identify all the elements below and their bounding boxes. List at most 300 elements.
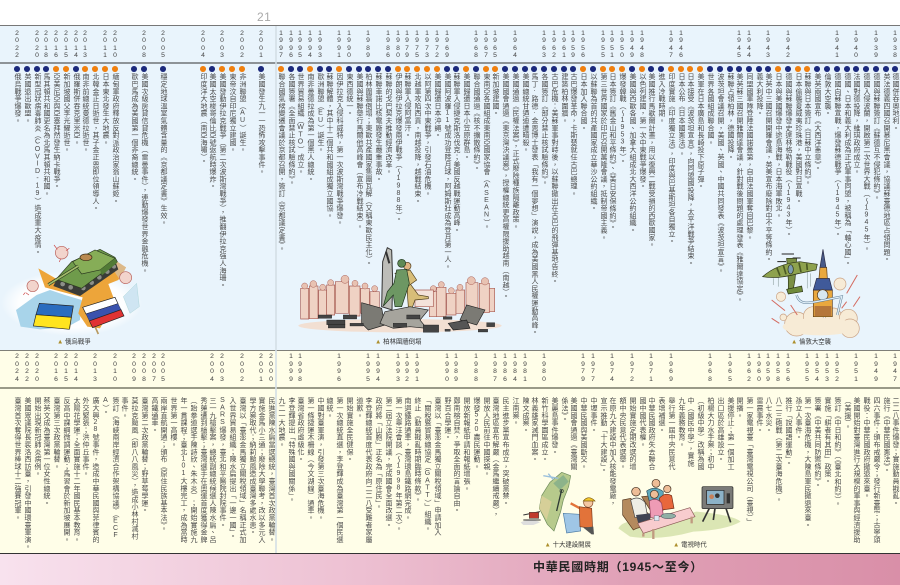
world timeline events: 倫敦大空襲。 [824, 72, 831, 116]
world timeline events: 世界各國組成聯合國。 [707, 72, 714, 146]
Taiwan timeline years: 1 [454, 353, 458, 360]
world timeline years: 0 [259, 37, 263, 44]
Taiwan timeline events: 四六事件；頒布戒嚴令；發行新臺幣；古寧頭 [873, 396, 880, 542]
world timeline years: 2 [435, 52, 439, 59]
world timeline years: 1 [669, 30, 673, 36]
world timeline years: 1 [854, 30, 858, 36]
Taiwan timeline years: 9 [454, 376, 458, 383]
world timeline years: 9 [396, 37, 400, 44]
world timeline years: 2 [74, 30, 78, 36]
Taiwan timeline events: 民進黨陳水扁當選總統，臺灣首次政黨輪替。 [268, 396, 275, 542]
world timeline events: 美國歸還日本沖繩。 [434, 72, 441, 138]
world timeline events: 緬甸軍政府釋放反對派政治家翁山蘇姬。 [112, 72, 119, 204]
Taiwan timeline years: 3 [93, 376, 97, 383]
Taiwan timeline events: 江南案。 [512, 396, 519, 426]
world timeline years: 1 [552, 30, 556, 36]
world timeline years: 1 [581, 30, 585, 36]
Taiwan timeline years: 1 [93, 368, 97, 375]
Taiwan timeline years: 7 [630, 368, 634, 375]
world timeline years: 1 [337, 30, 341, 36]
Taiwan timeline years: 1 [766, 353, 770, 360]
Taiwan timeline years: 4 [513, 376, 517, 383]
Taiwan timeline years: 5 [366, 376, 370, 383]
Taiwan timeline years: 1 [581, 353, 585, 360]
Taiwan timeline events: 開始出現新冠肺炎病例。 [34, 396, 41, 477]
Taiwan timeline years: 6 [503, 376, 507, 383]
world timeline years: 6 [493, 45, 497, 52]
world timeline events: 伊朗與伊拉克爆發兩伊戰爭（～ 1988 年）。 [395, 72, 402, 222]
world timeline events: 美國推行馬歇爾計畫，用以復興二戰受損的西歐國家。 [648, 72, 655, 248]
world timeline years: 6 [474, 45, 478, 52]
world timeline years: 2 [786, 52, 790, 59]
world timeline years: 0 [161, 37, 165, 44]
world timeline years: 0 [54, 37, 58, 44]
world timeline years: 4 [630, 45, 634, 52]
Taiwan timeline years: 2 [113, 353, 117, 360]
world timeline years: 5 [581, 45, 585, 52]
world timeline events: 爆發韓戰（～ 1953 年）。 [619, 72, 626, 164]
world timeline years: 2 [552, 52, 556, 59]
Taiwan timeline years: 7 [591, 376, 595, 383]
Taiwan timeline years: 0 [25, 361, 29, 368]
Taiwan timeline years: 2 [142, 353, 146, 360]
world timeline years: 9 [484, 37, 488, 44]
Taiwan timeline years: 6 [786, 376, 790, 383]
world timeline years: 6 [484, 45, 488, 52]
world timeline events: 印度洋大地震（南亞海嘯）。 [200, 72, 207, 164]
world timeline years: 2 [220, 30, 224, 36]
Taiwan timeline events: 表增補選。 [658, 396, 665, 433]
Taiwan timeline years: 5 [728, 376, 732, 383]
world timeline years: 6 [581, 52, 585, 59]
world timeline events: 美國通過《民權法案》，正式廢除種族隔離政策。 [512, 72, 519, 230]
world timeline events: 穩定地球溫室氣體含量的《京都議定書》生效。 [160, 72, 167, 226]
Taiwan timeline years: 8 [708, 376, 712, 383]
world timeline years: 0 [854, 52, 858, 59]
world timeline years: 9 [279, 37, 283, 44]
Taiwan timeline events: 宣示推動「十大建設」。 [600, 396, 607, 473]
world timeline years: 8 [474, 52, 478, 59]
Taiwan timeline events: 民主進步黨宣布成立，突破黨禁。 [502, 396, 509, 506]
world timeline years: 1 [766, 30, 770, 36]
world timeline years [15, 30, 897, 59]
Taiwan timeline events: 三一九槍擊案，總統副總統候選人陳水扁、呂 [209, 396, 216, 542]
Taiwan timeline years: 1 [405, 353, 409, 360]
world timeline years: 3 [874, 45, 878, 52]
Taiwan timeline years: 1 [649, 353, 653, 360]
title bar [0, 553, 900, 585]
Taiwan timeline events: 政府將「山胞」正名為「原住民」。 [375, 396, 382, 510]
Taiwan timeline years: 2 [240, 376, 244, 383]
Taiwan timeline years: 9 [376, 361, 380, 368]
Taiwan timeline events: 第一次臺海危機，大陳島軍民撤退來臺。 [804, 396, 811, 528]
Taiwan timeline events: （跆拳道選手陳詩欣、朱木炎）；開始實施九 [190, 396, 197, 542]
world timeline years: 5 [601, 45, 605, 52]
world timeline years: 9 [562, 37, 566, 44]
Taiwan timeline years: 2 [15, 353, 19, 360]
world timeline events: 義大利投降。 [756, 72, 763, 116]
world timeline years: 1 [630, 30, 634, 36]
Taiwan timeline years: 5 [786, 368, 790, 375]
world timeline years: 4 [737, 45, 741, 52]
Taiwan timeline events: 開始實施全民健保。 [346, 396, 353, 462]
world timeline years: 4 [747, 45, 751, 52]
page fold [275, 26, 277, 553]
world timeline years: 0 [201, 45, 205, 52]
world timeline events: 日本加入聯合國。 [580, 72, 587, 131]
Taiwan timeline years: 8 [542, 368, 546, 375]
world timeline years: 8 [366, 45, 370, 52]
world timeline events: 南非曼德拉成為第一個黑人總統。 [307, 72, 314, 182]
Taiwan timeline years: 0 [210, 361, 214, 368]
Taiwan timeline events: 李登輝總統首度代表政府向二二八受難者家屬 [365, 396, 372, 542]
Taiwan timeline years: 1 [728, 353, 732, 360]
world timeline years: 2 [15, 30, 19, 36]
Taiwan timeline years: 9 [396, 361, 400, 368]
Taiwan timeline years: 9 [815, 361, 819, 368]
Taiwan timeline events: 臺灣以「臺澎金馬獨立關稅領域」名稱正式加 [239, 396, 246, 542]
world timeline events: 英國退出歐盟。 [24, 72, 31, 124]
world timeline years: 1 [835, 52, 839, 59]
Taiwan timeline years: 0 [74, 361, 78, 368]
Taiwan timeline events: 李登輝提出「特殊國與國關係」。 [288, 396, 295, 502]
Taiwan timeline years: 0 [269, 361, 273, 368]
Taiwan timeline years: 9 [415, 368, 419, 375]
world timeline years: 9 [474, 37, 478, 44]
world timeline years: 3 [83, 52, 87, 59]
Taiwan timeline years: 2 [54, 353, 58, 360]
world timeline years: 1 [308, 30, 312, 36]
Taiwan timeline years: 1 [854, 353, 858, 360]
Taiwan timeline years: 1 [289, 353, 293, 360]
world timeline years: 1 [74, 45, 78, 52]
illustration: Russia-Ukraine war tank and flags [1, 245, 142, 336]
Taiwan timeline years: 2 [240, 353, 244, 360]
Taiwan timeline years: 6 [708, 368, 712, 375]
Taiwan timeline years: 9 [835, 361, 839, 368]
world timeline events: 印度實施《印度獨立法》，印度與巴基斯坦各自獨立。 [668, 72, 675, 244]
Taiwan timeline years: 8 [503, 368, 507, 375]
Taiwan timeline years: 9 [854, 361, 858, 368]
world timeline years: 0 [620, 52, 624, 59]
world timeline events: 新加坡建國。 [492, 72, 499, 116]
world timeline years: 1 [279, 30, 283, 36]
Taiwan timeline years: 9 [454, 361, 458, 368]
world timeline years: 9 [493, 37, 497, 44]
world timeline years: 9 [415, 37, 419, 44]
world timeline events: 英法德義四國召開慕尼黑會議，協議蘇臺德地區占領問題。 [883, 72, 890, 262]
Taiwan timeline years: 9 [503, 361, 507, 368]
Taiwan timeline years: 2 [161, 353, 165, 360]
world timeline years: 9 [347, 37, 351, 44]
Taiwan timeline events: 開放新報紙申請和報紙增張。 [463, 396, 470, 491]
Taiwan timeline years: 9 [337, 361, 341, 368]
Taiwan timeline events: 臺灣第二次政黨輪替；野草莓學運。 [141, 396, 148, 513]
world timeline years: 4 [786, 45, 790, 52]
Taiwan timeline years: 5 [835, 368, 839, 375]
world timeline years: 9 [308, 45, 312, 52]
Taiwan timeline years: 7 [610, 368, 614, 375]
Taiwan timeline years: 0 [142, 361, 146, 368]
Taiwan timeline years: 9 [396, 368, 400, 375]
Taiwan timeline years: 1 [74, 368, 78, 375]
Taiwan timeline years: 0 [113, 361, 117, 368]
Taiwan timeline years: 9 [542, 361, 546, 368]
world timeline years: 1 [103, 52, 107, 59]
Taiwan timeline years: 1 [513, 353, 517, 360]
world timeline events: 馬其頓共和國更名為北馬其頓共和國。 [43, 72, 50, 197]
world timeline years: 9 [366, 37, 370, 44]
world timeline years: 5 [161, 52, 165, 59]
world timeline events: 歐洲聯盟（ EU ）誕生。 [317, 72, 324, 153]
world timeline events: 各國簽訂《部分禁止核試驗條約》。 [541, 72, 548, 186]
world timeline years: 2 [15, 52, 19, 59]
Taiwan timeline years: 1 [445, 353, 449, 360]
world timeline years: 1 [493, 30, 497, 36]
world timeline years: 2 [259, 30, 263, 36]
world timeline years: 9 [669, 37, 673, 44]
world timeline events: 聯合國通過《核不擴散條約》。 [473, 72, 480, 171]
Taiwan timeline years: 1 [259, 376, 263, 383]
world timeline events: 新加坡國父李光耀逝世。 [63, 72, 70, 153]
world timeline years: 0 [64, 37, 68, 44]
Taiwan timeline years: 9 [786, 361, 790, 368]
world timeline events: 美軍在日本廣島和長崎投下原子彈。 [697, 72, 704, 189]
world timeline years: 5 [493, 52, 497, 59]
world timeline years: 9 [386, 37, 390, 44]
Taiwan timeline years: 2 [835, 376, 839, 383]
Taiwan timeline years: 5 [161, 376, 165, 383]
world timeline years: 7 [669, 52, 673, 59]
world timeline years: 4 [308, 52, 312, 59]
world timeline years: 2 [64, 30, 68, 36]
Taiwan timeline years: 0 [240, 368, 244, 375]
Taiwan timeline years: 4 [74, 376, 78, 383]
Taiwan timeline years: 0 [259, 368, 263, 375]
Taiwan timeline years: 0 [152, 368, 156, 375]
Taiwan timeline events: 高鐵通車。 [151, 396, 158, 433]
Taiwan timeline years: 1 [854, 376, 858, 383]
world timeline years: 7 [425, 45, 429, 52]
Taiwan timeline years: 9 [445, 361, 449, 368]
world timeline years: 9 [786, 37, 790, 44]
world timeline years: 2 [113, 30, 117, 36]
world timeline years: 8 [893, 52, 897, 59]
world timeline years: 2 [35, 30, 39, 36]
Taiwan timeline years: 1 [893, 353, 897, 360]
world timeline years: 9 [854, 37, 858, 44]
Taiwan timeline years: 9 [445, 368, 449, 375]
Taiwan timeline events: 反高中課綱微調運動；馬習會於新加坡展開。 [63, 396, 70, 542]
world timeline years: 0 [396, 52, 400, 59]
world timeline events: 建築柏林圍牆。 [561, 72, 568, 124]
world timeline years: 1 [601, 30, 605, 36]
Taiwan timeline years: 9 [893, 361, 897, 368]
Taiwan timeline events: 鄭南榕自焚，爭取全面的言論自由。 [453, 396, 460, 513]
world timeline events: 波茨坦會議召開，美國、英國、中國共同發表《波茨坦宣言》。 [717, 72, 724, 273]
Taiwan timeline events: 係法》。 [561, 396, 568, 422]
Taiwan timeline years: 0 [93, 361, 97, 368]
Taiwan timeline events: A ）。 [102, 396, 109, 415]
world timeline years: 1 [874, 30, 878, 36]
Taiwan timeline years: 1 [776, 353, 780, 360]
Taiwan timeline events: 中國對臺軍演，引發第三次臺海危機。 [317, 396, 324, 521]
Taiwan timeline years: 6 [54, 376, 58, 383]
world timeline years: 2 [161, 30, 165, 36]
Taiwan timeline years: 9 [649, 361, 653, 368]
world timeline years: 5 [737, 52, 741, 59]
world timeline years: 1 [445, 30, 449, 36]
world timeline years: 6 [679, 52, 683, 59]
world timeline years: 9 [337, 37, 341, 44]
world timeline events: 德國與蘇聯簽訂《蘇德互不侵犯條約》。 [873, 72, 880, 200]
Taiwan timeline years: 0 [152, 361, 156, 368]
world timeline years: 9 [874, 37, 878, 44]
world timeline events: 因伊拉克入侵科威特，第一次波斯灣戰爭爆發。 [336, 72, 343, 226]
world timeline years: 3 [893, 45, 897, 52]
world timeline events: 以蘇聯為首的共產國家成立華沙公約組織。 [590, 72, 597, 211]
Taiwan timeline years: 9 [415, 361, 419, 368]
world timeline years: 4 [669, 45, 673, 52]
Taiwan timeline years: 2 [74, 353, 78, 360]
world timeline years: 0 [35, 52, 39, 59]
world timeline events: 日本公布《日本國憲法》。 [678, 72, 685, 157]
world timeline events: 以阿第四次中東戰爭，引發石油危機。 [424, 72, 431, 197]
world timeline events: 俄烏戰爭爆發。 [14, 72, 21, 124]
world timeline years: 3 [542, 52, 546, 59]
Taiwan timeline years: 8 [776, 376, 780, 383]
world timeline years: 9 [874, 52, 878, 59]
Taiwan timeline years: 2 [35, 353, 39, 360]
Taiwan timeline years: 2 [25, 368, 29, 375]
world timeline years: 5 [571, 45, 575, 52]
Taiwan timeline years: 5 [805, 376, 809, 383]
Taiwan timeline years: 2 [269, 353, 273, 360]
world timeline years: 9 [318, 37, 322, 44]
Taiwan timeline years: 6 [747, 368, 751, 375]
world timeline years: 9 [630, 52, 634, 59]
Taiwan timeline years: 1 [610, 353, 614, 360]
Taiwan timeline years: 0 [142, 368, 146, 375]
Taiwan timeline years: 2 [210, 353, 214, 360]
illustration: Ten Major Construction Projects [521, 472, 595, 534]
world timeline years: 1 [318, 30, 322, 36]
world timeline years: 5 [610, 45, 614, 52]
world timeline years: 6 [386, 52, 390, 59]
world timeline years: 1 [474, 30, 478, 36]
world timeline years: 9 [445, 37, 449, 44]
world timeline years: 8 [142, 52, 146, 59]
world timeline years: 1 [44, 45, 48, 52]
Taiwan timeline years: 6 [337, 376, 341, 383]
Taiwan timeline years: 5 [825, 368, 829, 375]
Taiwan timeline years: 9 [757, 361, 761, 368]
Taiwan timeline years: 3 [825, 376, 829, 383]
Taiwan timeline events: 九年義務教育。 [678, 396, 685, 448]
world timeline years: 0 [44, 37, 48, 44]
world timeline events: 日本東北發生大地震。 [102, 72, 109, 146]
Taiwan timeline years: 0 [259, 361, 263, 368]
Taiwan timeline years: 9 [405, 368, 409, 375]
world timeline years: 5 [415, 52, 419, 59]
band rule: bottom years [0, 387, 900, 389]
Taiwan timeline events: 國中國代表權。 [639, 396, 646, 448]
Taiwan timeline years: 8 [298, 376, 302, 383]
caption: Russia-Ukraine war: ▲ 俄烏戰爭 [57, 337, 91, 346]
Taiwan timeline years: 9 [591, 361, 595, 368]
world timeline years: 1 [54, 45, 58, 52]
world timeline events: 日本偷襲夏威夷珍珠港，美國對日宣戰。 [795, 72, 802, 204]
world timeline events: 蘇聯的戈巴契夫推動經濟改革。 [385, 72, 392, 175]
world timeline years: 2 [54, 30, 58, 36]
world timeline years: 0 [240, 45, 244, 52]
Taiwan timeline years: 1 [835, 353, 839, 360]
Taiwan timeline years: 9 [630, 361, 634, 368]
Taiwan timeline years: 1 [337, 353, 341, 360]
world timeline years: 1 [513, 30, 517, 36]
Taiwan timeline years: 9 [581, 361, 585, 368]
world timeline years: 4 [679, 45, 683, 52]
Taiwan timeline years: 9 [874, 361, 878, 368]
world timeline years: 1 [542, 30, 546, 36]
Taiwan timeline years: 0 [269, 368, 273, 375]
world timeline years: 6 [289, 52, 293, 59]
Taiwan timeline years: 4 [874, 368, 878, 375]
world timeline years: 9 [513, 37, 517, 44]
world timeline years: 9 [552, 37, 556, 44]
world timeline events: 北越軍攻陷西貢，南越投降，越戰結束。 [414, 72, 421, 204]
Taiwan timeline years: 0 [445, 376, 449, 383]
world timeline years: 9 [893, 37, 897, 44]
Taiwan timeline years: 2 [93, 353, 97, 360]
Taiwan timeline events: 在原九大建設中加入核能發電廠， [609, 396, 616, 506]
Taiwan timeline events: 額中央民意代表選舉。 [619, 396, 626, 470]
world timeline years: 9 [279, 45, 283, 52]
Taiwan timeline years: 8 [142, 376, 146, 383]
world timeline events: 美國總統甘迺迪遭暗殺。 [522, 72, 529, 153]
world timeline years: 1 [396, 30, 400, 36]
Taiwan timeline events: 開播。 [736, 396, 743, 418]
Taiwan timeline events: 外交緊張；洪仲丘事件。 [82, 396, 89, 477]
world timeline years: 7 [415, 45, 419, 52]
world timeline years: 3 [220, 52, 224, 59]
Taiwan timeline years: 9 [493, 361, 497, 368]
world timeline years: 1 [113, 45, 117, 52]
Taiwan timeline years: 2 [64, 353, 68, 360]
world timeline events: 蘇聯與日本簽訂《日蘇中立條約》。 [804, 72, 811, 186]
Taiwan timeline events: （美援）。 [844, 396, 851, 430]
Taiwan timeline years: 9 [513, 361, 517, 368]
Taiwan timeline events: 總統。 [326, 396, 333, 418]
Taiwan timeline years: 4 [210, 376, 214, 383]
Taiwan timeline events [14, 396, 900, 550]
Taiwan timeline years: 6 [669, 368, 673, 375]
world timeline years: 6 [542, 45, 546, 52]
world timeline events: 古巴爆發革命，卡斯楚就任古巴總理。 [570, 72, 577, 197]
Taiwan timeline years: 9 [405, 361, 409, 368]
Taiwan timeline years: 1 [542, 353, 546, 360]
world timeline years: 1 [484, 30, 488, 36]
world timeline years: 0 [113, 37, 117, 44]
world timeline years: 4 [640, 45, 644, 52]
Taiwan timeline events: 第一家電視臺「臺灣電視公司（臺視）」 [746, 396, 753, 524]
world timeline events: 以色列建國，第一次中東戰爭爆發。 [639, 72, 646, 189]
page number: 21 [257, 10, 271, 24]
world timeline events: 非洲聯盟（ AU ）誕生。 [239, 72, 246, 153]
Taiwan timeline events: 「關稅暨貿易總協定（ GATT ）」組織。 [424, 396, 431, 532]
world timeline years: 4 [513, 52, 517, 59]
Taiwan timeline years: 0 [35, 361, 39, 368]
